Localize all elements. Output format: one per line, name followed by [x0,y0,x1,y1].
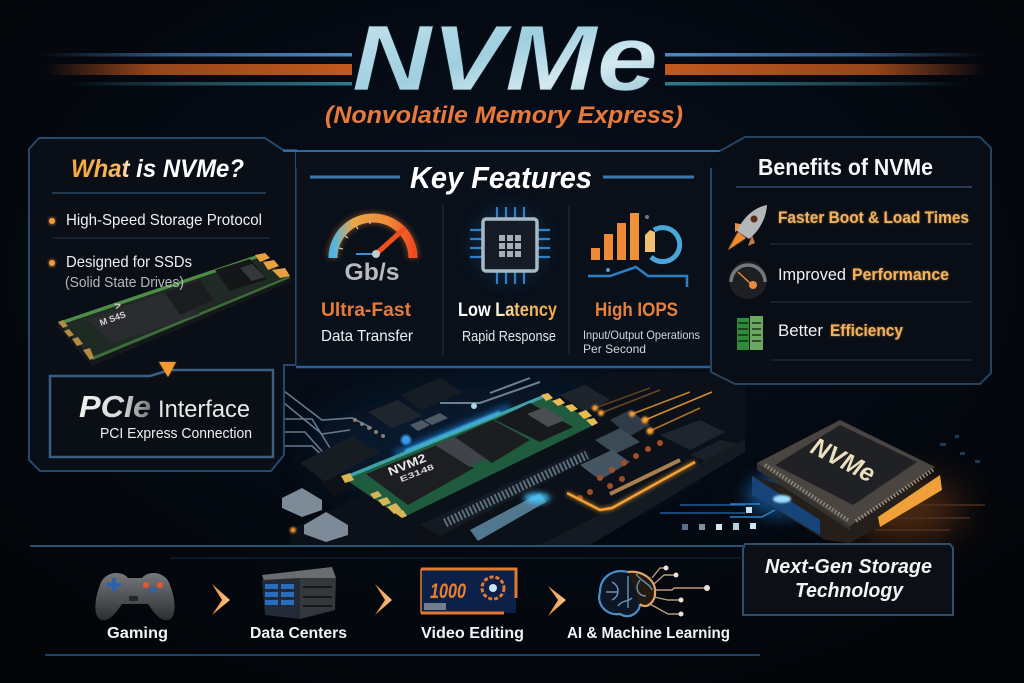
icon: speedometer: Gb/s [344,259,400,286]
application: video editing [421,569,524,642]
arrow 3 [548,586,566,616]
SSD module illustration [58,253,290,366]
gold contacts rear [541,393,598,426]
board glow [310,390,690,510]
feature: ultra-fast: Data Transfer [321,328,414,345]
application: data centers: Data Centers [250,625,347,642]
next-gen label box: Next-Gen Storage [765,556,932,578]
NVMe processor illustration [730,420,985,615]
feature: low latency [458,207,557,345]
panel frame [29,138,296,471]
left circuit traces [284,391,372,458]
benefit: better efficiency [737,316,903,350]
m.2 module blue glow [395,408,510,455]
benefit: faster boot: Faster Boot & Load Times [778,208,969,227]
feature: high IOPS: Per Second [583,342,646,356]
benefit: improved performance: Improved [778,265,846,284]
left speed lines [40,53,352,86]
title NVMe: NVMe [352,6,658,110]
board base [290,372,745,545]
orange nodes [592,405,654,434]
application: gaming: Gaming [107,625,168,642]
chip text: NVMe [806,432,880,488]
right traces [875,505,985,530]
orange light streaks [595,388,712,431]
bottom data dots [682,524,739,530]
icon: video editor screen: 1000 [430,580,466,603]
gold contacts front [341,473,407,518]
bullet item 2: Designed for SSDs [66,254,192,271]
feature: ultra-fast: Ultra-Fast [321,300,412,321]
icon: bar chart [588,213,687,287]
feature: high IOPS: Input/Output Operations [583,328,700,342]
heading: Key Features [410,160,592,195]
icon: AI brain [599,566,710,616]
chip label: NVM2 [386,451,429,479]
chip label: E3148 [399,462,436,484]
benefit: better efficiency: Efficiency [830,321,903,340]
panel: what is NVMe [29,138,296,471]
icon: server rack [262,567,336,619]
PCIe interface box: Interface [158,396,250,423]
icon: game controller [95,573,175,620]
m.2 top edge highlight [405,412,500,451]
left data nodes [730,504,775,529]
application: AI [567,566,730,642]
chip label [386,449,436,487]
panel: key features [283,150,722,367]
panel frame [711,137,991,384]
faint data dots [940,435,980,463]
orange glow [850,484,960,536]
circuit board illustration [282,372,745,545]
bullet item 1: High-Speed Storage Protocol [66,212,262,229]
feature: high IOPS: High IOPS [595,300,678,321]
applications strip [30,546,760,655]
subtitle: (Nonvolatile Memory Express) [325,102,683,129]
m.2 SSD module [341,393,598,518]
pin rows [765,465,848,520]
next-gen label box [743,544,953,615]
pin layer [757,420,935,526]
benefit: better efficiency: Better [778,321,823,340]
main controller chip [366,445,474,505]
right electronic components [540,385,745,545]
SSD module illustration: > [113,299,123,313]
icon: performance gauge [729,261,767,299]
application: gaming [95,573,175,642]
application: data centers [250,567,347,642]
orange glowing trace [567,462,695,510]
socket slot [420,448,592,544]
memory chips [435,437,490,467]
icon: rocket [728,205,767,250]
feature: low latency: Low Latency [458,300,557,321]
application: video editing: Video Editing [421,625,524,642]
blue glow bar [470,493,546,541]
PCIe interface box [50,370,273,457]
components left [282,378,462,542]
icon: battery server [737,316,763,350]
upper connector traces [440,378,540,403]
bullet item 2 [49,254,192,291]
SSD chip marking: M S4S [98,309,127,328]
application: AI: AI & Machine Learning [567,625,730,642]
benefit: improved performance [729,261,949,299]
heading: What is NVMe? [71,155,244,183]
next-gen label box: Technology [795,580,904,602]
arrow 1 [212,584,230,615]
PCIe interface box: PCIe [79,389,151,424]
base layer [752,476,942,543]
panel: benefits [711,137,991,384]
benefit: faster boot [728,205,969,250]
feature: low latency: Rapid Response [462,328,556,345]
down arrow [159,362,176,377]
bullet item 2: (Solid State Drives) [65,274,184,291]
feature: ultra-fast [321,218,414,345]
panel frame [283,150,720,366]
icon: processor chip [470,207,550,284]
chip top [775,425,917,505]
benefit: improved performance: Performance [852,265,949,284]
blue glow [746,473,814,517]
right speed lines [665,53,985,86]
arrow 2 [375,584,392,615]
heading: Benefits of NVMe [758,154,933,180]
feature: high IOPS [583,213,700,356]
title banner [40,6,985,129]
gold connectors [58,320,94,360]
PCIe interface box: PCI Express Connection [100,425,252,442]
